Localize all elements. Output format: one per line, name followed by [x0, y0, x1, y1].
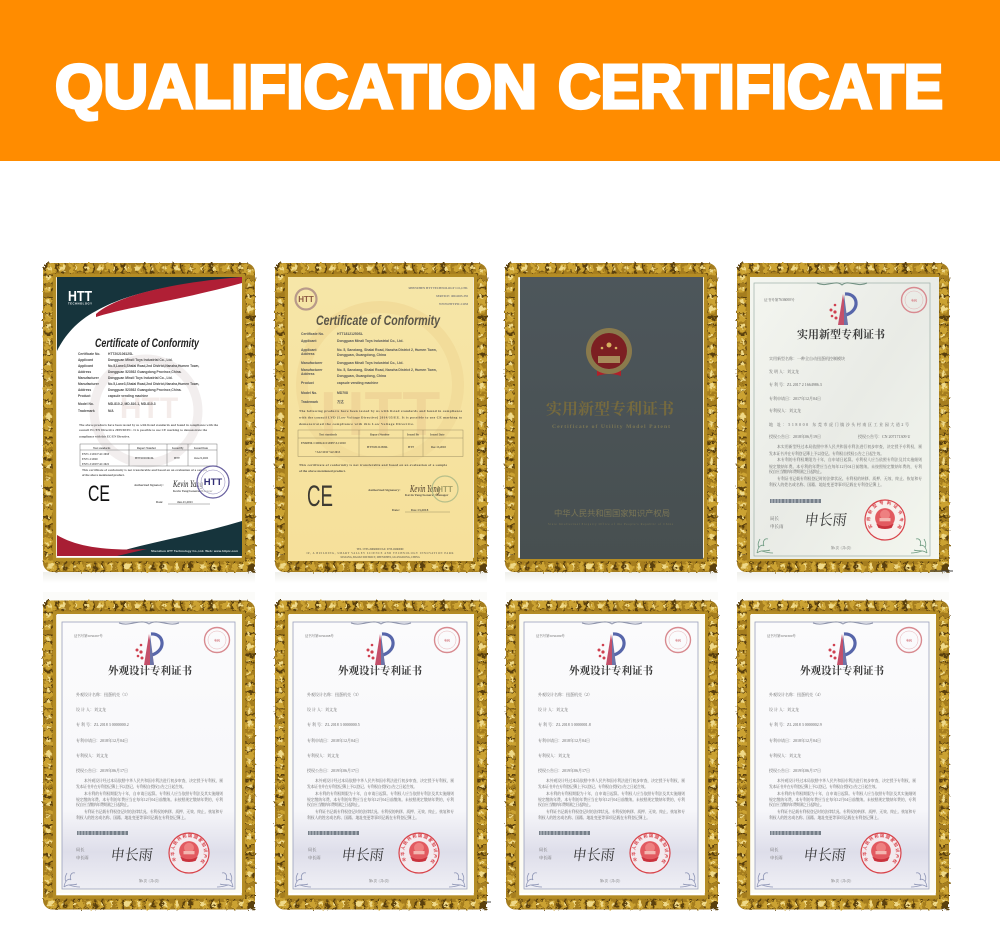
stamp: 专利 [906, 638, 912, 642]
certificate: design patent 2: 权自应当缴纳年费期满之日起终止。 [307, 802, 362, 807]
certificate: design patent 3: 局长 [539, 846, 547, 853]
certificate: design patent 4: 权自应当缴纳年费期满之日起终止。 [769, 802, 824, 807]
certificate: HTT conformity on yellow paper: Certificate No. [301, 332, 324, 336]
certificate: design patent 4: 外观设计专利证书 [800, 664, 884, 677]
certificate: utility model patent: 发 明 人：刘文龙 [769, 368, 799, 374]
seal [860, 832, 902, 874]
certificate: HTT conformity on white with teal and red swooshes: Manufacturer [78, 376, 100, 380]
certificate: design patent 1: 利权人的姓名或名称、国籍、地址变更等事项记载在专利登记簿上。 [76, 815, 188, 820]
certificate: design patent 2: 局长 [308, 846, 316, 853]
certificate: HTT conformity on yellow paper: Dec.13,2018 [431, 445, 446, 449]
certificate: HTT conformity on yellow paper: Kevin Yang/General Manager [405, 493, 449, 497]
certificate: HTT conformity on white with teal and red swooshes: capsule vending machine [108, 394, 148, 398]
certificate: utility model patent: 申长雨 [803, 509, 848, 530]
certificate: HTT conformity on white with teal and red swooshes: Trademark [78, 409, 95, 413]
certificate: HTT conformity on yellow paper: Date: [392, 508, 400, 512]
certificate: design patent 4: 授权公告日：2019年06月17日 [769, 767, 821, 773]
certificate: design patent 1: 规定缴纳年费。本专利的年费应当在每年12月04日前缴纳。未按照规定缴纳年费的，专利 [76, 797, 223, 802]
stamp: 专利 [214, 638, 220, 642]
certificate: design patent 3: 第1页（共1页） [600, 878, 622, 883]
certificate: HTT conformity on white with teal and red swooshes: The above products have been tested by us with listed standards and found in compliance with the [79, 423, 219, 427]
certificate: design patent 4: 专 利 号：ZL 2018 3 0000002.9 [769, 721, 822, 727]
certificate: HTT conformity on yellow paper: Certificate of Conformity [316, 312, 441, 328]
certificate: HTT conformity on white with teal and red swooshes: Manufacturer [78, 382, 100, 386]
certificate: design patent 4: 本专利的专利权期限为十年，自申请日起算。专利权人应当依照专利法及其实施细则 [777, 791, 916, 796]
certificate: design patent 3: 规定缴纳年费。本专利的年费应当在每年12月04日前缴纳。未按照规定缴纳年费的，专利 [538, 797, 685, 802]
black mark at frame corner [485, 902, 491, 903]
certificate: design patent 4: 局长 [770, 846, 778, 853]
certificate: HTT conformity on yellow paper: HTT [408, 445, 414, 449]
certificate: design patent 1: 授权公告日：2019年06月17日 [76, 767, 128, 773]
certificate: HTT conformity on yellow paper: HTT [298, 295, 314, 304]
certificate: design patent 2: 申长雨 [308, 854, 321, 861]
certificate: HTT conformity on yellow paper: IF, A BUILDING, SMART VALLEY SCIENCE AND TECHNOLOGY INNOVATION PARK [306, 552, 454, 555]
certificate: HTT conformity on yellow paper: CE [307, 480, 333, 513]
certificate: HTT conformity on yellow paper: Product [301, 381, 315, 385]
certificate: HTT conformity on white with teal and red swooshes: Applicant [78, 358, 94, 362]
certificate: HTT conformity on white with teal and red swooshes: of the above mentioned product. [82, 473, 125, 477]
certificate: design patent 4: 专利证书记载专利权登记时的法律状况。专利权的转移、质押、无效、终止、恢复和专 [777, 809, 916, 814]
certificate: utility model patent: 专利权人：刘文龙 [769, 407, 801, 413]
certificate: design patent 1: 专利申请日：2018年12月04日 [76, 737, 128, 743]
certificate: utility model patent: 本专利的专利权期限为十年，自申请日起算。专利权人应当依照专利法及其实施细则 [777, 457, 922, 462]
seal [864, 499, 906, 541]
certificate: utility model patent: 实用新型专利证书 [797, 327, 886, 341]
seal: 中华人民共和国国家知识产权局 [170, 834, 208, 864]
certificate: dark utility model patent cover [505, 268, 717, 583]
certificate: HTT conformity on yellow paper: HTT [437, 485, 453, 494]
certificate: HTT conformity on yellow paper: Report Number [370, 432, 390, 436]
certificate: HTT conformity on yellow paper: Applicant [301, 339, 317, 343]
certificate: HTT conformity on white with teal and red swooshes: Kevin Yang/General Manager [173, 489, 213, 493]
header banner [0, 0, 1000, 161]
certificate: HTT conformity on yellow paper: Model No. [301, 391, 317, 395]
certificate: HTT conformity on yellow paper: SERVICE: 400-6025-355 [436, 294, 468, 298]
stamp [666, 628, 690, 652]
certificate: HTT conformity on yellow paper: No. 5, Sanxiang, Shalai Road, Nanzha District 2, Humen Town, [337, 348, 437, 352]
title: CERTIFICATE [558, 53, 943, 122]
seal: 中华人民共和国国家知识产权局 [862, 834, 900, 864]
icon: national emblem [586, 328, 632, 376]
certificate: utility model patent: 专利证书记载专利权登记时的法律状况。专利权的转移、质押、无效、终止、恢复和专 [777, 476, 922, 481]
certificate: HTT conformity on yellow paper: No. 5, Sanxiang, Shalai Road, Nanzha District 2, Humen Town, [337, 368, 437, 372]
certificate: design patent 2: 设 计 人：刘文龙 [307, 706, 337, 712]
certificate: design patent 2: 利权人的姓名或名称、国籍、地址变更等事项记载在专利登记簿上。 [307, 815, 419, 820]
certificate: utility model patent: 专 利 号：ZL 2017 2 1664986.3 [769, 381, 822, 387]
certificate: HTT conformity on yellow paper: This certificate of conformity is not transferable and based on an evaluation of a sample [299, 463, 447, 467]
certificate: HTT conformity on white with teal and red swooshes: Dongguan 523932 Guangdong Province,China. [108, 370, 182, 374]
certificate: HTT conformity on yellow paper: EN60950-1:2006/A11:2009+A1:2010 [301, 441, 346, 445]
certificate: HTT conformity on yellow paper: Authorized Signatory: [368, 488, 400, 492]
certificate: design patent 3: 权自应当缴纳年费期满之日起终止。 [538, 802, 593, 807]
certificate: design patent 1: 本外观设计经过本局依照中华人民共和国专利法进行初步审查，决定授予专利权，颁 [84, 778, 223, 783]
stamp [896, 628, 922, 652]
certificate: HTT conformity on white with teal and red swooshes: N/A [108, 409, 114, 413]
certificate: HTT conformity on yellow paper: Dongguan, Guangdong, China [337, 374, 386, 378]
certificate: utility model patent: 利权人的姓名或名称、国籍、地址变更等事项记载在专利登记簿上。 [769, 482, 884, 487]
certificate: design patent 2: 规定缴纳年费。本专利的年费应当在每年12月04日前缴纳。未按照规定缴纳年费的，专利 [307, 797, 454, 802]
certificate: HTT conformity on white with teal and red swooshes: EN71-3:2019+A1:2021 [82, 463, 110, 466]
certificate: design patent 4: 设 计 人：刘文龙 [769, 706, 799, 712]
certificate: HTT conformity on white with teal and red swooshes: Test standards [93, 447, 111, 450]
certificate: HTT conformity on white with teal and red swooshes: This certificate of conformity is not transferable and based on an evaluation of a sample [82, 468, 208, 472]
certificate: HTT conformity on white with teal and red swooshes: MD-810-2, MD-810-1, MD-810-3 [108, 402, 156, 406]
stamp [204, 628, 230, 652]
certificate: design patent 2: 专利证书记载专利权登记时的法律状况。专利权的转移、质押、无效、终止、恢复和专 [315, 809, 454, 814]
certificate: HTT conformity on white with teal and red swooshes: EN71-1:2014+A1:2018 [82, 453, 110, 456]
certificate: design patent 3: 申长雨 [571, 844, 616, 865]
certificate: HTT conformity on yellow paper: XIXIANG, BAOAN DISTRICT, SHENZHEN, GUANGDONG, CHINA [340, 556, 420, 559]
certificate: HTT conformity on white with teal and red swooshes: Jun.21,2021 [177, 500, 193, 504]
certificate: design patent 3: 外观设计名称：扭蛋机壳（2） [538, 691, 592, 697]
certificate: utility model patent: 实用新型名称：一种全自动扭蛋机控制模块 [769, 355, 845, 361]
certificate: design patent 1: 设 计 人：刘文龙 [76, 706, 106, 712]
certificate: HTT conformity on yellow paper: HTT18121250SL [367, 445, 388, 449]
certificate: HTT conformity on white with teal and red swooshes: Issued By [172, 447, 184, 450]
certificate: design patent 3: 证书号第5050299号 [536, 633, 565, 638]
certificate: HTT conformity on white with teal and red swooshes: Issued Date [194, 447, 209, 450]
certificate: design patent 1: 外观设计专利证书 [108, 664, 192, 677]
certificate: design patent 3: 本外观设计经过本局依照中华人民共和国专利法进行初步审查，决定授予专利权，颁 [546, 778, 685, 783]
certificate: design patent 2: 外观设计专利证书 [338, 664, 422, 677]
certificate: utility model patent: 权自应当缴纳年费期满之日起终止。 [769, 469, 824, 474]
certificate: utility model patent: 专利申请日：2017年12月04日 [769, 395, 821, 401]
certificate: HTT conformity on yellow paper: Address [301, 352, 315, 356]
certificate: HTT conformity on white with teal and red swooshes: Certificate of Conformity [95, 336, 200, 350]
certificate: HTT conformity on white with teal and red swooshes: HTT [204, 477, 222, 488]
certificate: HTT conformity on white with teal and red swooshes: Dongguan Minzli Toys Industrial Co., Ltd. [108, 376, 173, 380]
certificate: HTT conformity on yellow paper: Test standards [319, 432, 338, 436]
stamp: 专利 [444, 638, 450, 642]
certificate: HTT conformity on white with teal and red swooshes: Dongguan Minzli Toys Industrial Co., Ltd. [108, 358, 173, 362]
certificate: utility model patent: 第1页（共1页） [831, 545, 853, 550]
certificate: HTT conformity on yellow paper [275, 268, 487, 583]
certificate: design patent 2: 发本证书并在专利登记簿上予以登记。专利权自授权公告之日起生效。 [307, 784, 417, 789]
certificate: design patent 3: 专 利 号：ZL 2018 3 0000001.8 [538, 721, 591, 727]
certificate: design patent 1: 外观设计名称：扭蛋机壳（1） [76, 691, 130, 697]
certificate: HTT conformity on white with teal and red swooshes: council EC/EN Directive 2009/48/EC. It is possible to use CE marking to demonstrate the [79, 428, 208, 432]
stamp [902, 288, 926, 312]
certificate: HTT conformity on white with teal and red swooshes: Product [78, 394, 91, 398]
certificate: utility model patent: 授权公告日：2018年06月19日 [769, 433, 821, 439]
certificate: design patent 2 [273, 599, 489, 911]
title [55, 53, 943, 122]
seal: 中华人民共和国国家知识产权局 [632, 834, 668, 864]
certificate: HTT conformity on yellow paper: Address [301, 372, 315, 376]
certificate: design patent 3: 设 计 人：刘文龙 [538, 706, 568, 712]
certificate: HTT conformity on white with teal and red swooshes: EN71-2:2020 [82, 458, 98, 461]
certificate: utility model patent: 局长 [770, 515, 779, 522]
certificate: utility model patent [735, 262, 951, 579]
certificate: HTT conformity on yellow paper: WWW.HTTPIC.COM [439, 302, 468, 306]
certificate: HTT conformity on white with teal and red swooshes: HTT20210612SL [108, 352, 133, 356]
certificate: HTT conformity on white with teal and red swooshes: Dongguan 523932 Guangdong Province,China. [108, 388, 182, 392]
certificate: design patent 1 [41, 599, 257, 911]
certificate: HTT conformity on white with teal and red swooshes: Certificate No. [78, 352, 100, 356]
certificate: HTT conformity on yellow paper: The following products have been tested by us with listed standards and found in compliance [299, 409, 462, 413]
certificate: design patent 4 [735, 599, 951, 911]
certificate: design patent 1: 证书号第5050297号 [74, 633, 103, 638]
certificate: design patent 1: 专 利 号：ZL 2018 3 0000000.2 [76, 721, 129, 727]
seal [629, 832, 671, 874]
certificate: HTT conformity on white with teal and red swooshes: HTT [120, 392, 178, 425]
certificate: dark utility model patent cover: 中华人民共和国国家知识产权局 [554, 508, 670, 518]
certificate: HTT conformity on yellow paper: Applicant [301, 348, 317, 352]
certificate: design patent 2: 第1页（共1页） [369, 878, 391, 883]
certificate: utility model patent: 发本证书并在专利登记簿上予以登记。专利权自授权公告之日起生效。 [769, 451, 884, 456]
certificate: HTT conformity on white with teal and red swooshes: Address [78, 370, 91, 374]
stamp: 专利 [911, 298, 917, 302]
certificate: HTT conformity on white with teal and red swooshes: No.5,Lane3,Shalai Road,2nd District,Nanzha,Humen Town, [108, 382, 199, 386]
seal: 中华人民共和国国家知识产权局 [400, 834, 438, 864]
certificate: design patent 4: 专利权人：刘文龙 [769, 752, 801, 758]
certificate: design patent 3: 专利权人：刘文龙 [538, 752, 570, 758]
black mark at frame corner [930, 570, 953, 572]
certificate: design patent 2: 专 利 号：ZL 2018 3 0000000.5 [307, 721, 360, 727]
certificate: HTT conformity on white with teal and red swooshes: Kevin Yang [172, 479, 203, 489]
certificate: HTT conformity on yellow paper: Issued Date [430, 432, 445, 436]
certificate: HTT conformity on yellow paper: demonstrated the compliance with this Low Voltage Directive. [299, 422, 414, 426]
certificate: HTT conformity on white with teal and red swooshes: Model No. [78, 402, 94, 406]
certificate: HTT conformity on yellow paper: HTT18121250SL [337, 332, 363, 336]
certificate: design patent 4: 外观设计名称：扭蛋机壳（4） [769, 691, 823, 697]
certificate: HTT conformity on yellow paper: 万达 [337, 399, 344, 404]
certificate: design patent 3: 发本证书并在专利登记簿上予以登记。专利权自授权公告之日起生效。 [538, 784, 648, 789]
certificate: HTT conformity on yellow paper: TEL: 0755-26060000 FAX: 0755-26060000 [357, 548, 404, 551]
certificate: HTT conformity on white with teal and red swooshes: HTT2021061SL [135, 457, 154, 460]
certificate: HTT conformity on white with teal and red swooshes: Jun.21,2021 [194, 457, 209, 460]
certificate: design patent 1: 权自应当缴纳年费期满之日起终止。 [76, 802, 131, 807]
certificate: HTT conformity on yellow paper: Dongguan Minzli Toys Industrial Co., Ltd. [337, 339, 403, 343]
stamp [434, 628, 460, 652]
certificate: design patent 4: 规定缴纳年费。本专利的年费应当在每年12月04日前缴纳。未按照规定缴纳年费的，专利 [769, 797, 916, 802]
certificate: HTT conformity on yellow paper: Trademark [301, 400, 318, 404]
certificate: HTT conformity on yellow paper: MD708 [337, 391, 348, 395]
title: QUALIFICATION [55, 53, 537, 122]
certificate: HTT conformity on yellow paper: +A12:2011+A2:2013 [315, 450, 341, 454]
certificate: HTT conformity on yellow paper: with the council LVD (Low Voltage Directive) 2014/35/EU. It is possible to use CE marking to [299, 416, 462, 420]
certificate: design patent 3: 专利证书记载专利权登记时的法律状况。专利权的转移、质押、无效、终止、恢复和专 [546, 809, 685, 814]
certificate: design patent 1: 专利权人：刘文龙 [76, 752, 108, 758]
certificate: design patent 3: 外观设计专利证书 [569, 664, 654, 677]
certificate: HTT conformity on yellow paper: capsule vending machine [337, 381, 378, 385]
certificate: dark utility model patent cover: State Intellectual Property Office of the People's Republic of China [548, 523, 674, 526]
certificate: design patent 3: 申长雨 [539, 854, 552, 861]
certificate: HTT conformity on white with teal and red swooshes: Applicant [78, 364, 94, 368]
certificate: HTT conformity on white with teal and red swooshes: Report Number [137, 447, 157, 450]
certificate: design patent 4: 利权人的姓名或名称、国籍、地址变更等事项记载在专利登记簿上。 [769, 815, 881, 820]
certificate: design patent 2: 本专利的专利权期限为十年，自申请日起算。专利权人应当依照专利法及其实施细则 [315, 791, 454, 796]
certificate: design patent 2: 申长雨 [340, 844, 385, 865]
certificate: design patent 2: 证书号第5050298号 [305, 633, 334, 638]
certificate: utility model patent: 申长雨 [770, 523, 784, 530]
certificate: HTT conformity on white with teal and red swooshes: Authorized Signatory: [134, 483, 164, 487]
certificate: HTT conformity on white with teal and red swooshes: Shenzhen HTT Technology Co.,Ltd. Web: www.httpic.com [151, 549, 238, 553]
seal [168, 832, 210, 874]
certificate: HTT conformity on white with teal and red swooshes: Date: [156, 500, 163, 504]
certificate: HTT conformity on yellow paper: Dongguan Minzli Toys Industrial Co., Ltd. [337, 361, 403, 365]
certificate: HTT conformity on white with teal and red swooshes: CE [88, 481, 110, 506]
certificate: design patent 4: 申长雨 [802, 844, 847, 865]
certificate: HTT conformity on yellow paper: Dongguan, Guangdong, China [337, 353, 386, 357]
certificate: design patent 1: 本专利的专利权期限为十年，自申请日起算。专利权人应当依照专利法及其实施细则 [84, 791, 223, 796]
certificate: design patent 2: 授权公告日：2019年06月17日 [307, 767, 359, 773]
certificate: HTT conformity on yellow paper: Kevin Yang [409, 484, 440, 495]
certificate: utility model patent: 授权公告号：CN 207171309 U [858, 433, 911, 439]
certificate: design patent 3: 专利申请日：2018年12月04日 [538, 737, 590, 743]
certificate: HTT conformity on yellow paper: Manufacturer [301, 368, 323, 372]
certificate: HTT conformity on yellow paper: HTT [320, 380, 440, 449]
certificate: utility model patent: 地 址：518000 东莞市虎门镇沙头村南区工业园大道2号 [769, 421, 909, 427]
certificate: HTT conformity on yellow paper: Manufacturer [301, 361, 323, 365]
certificate: design patent 2: 专利申请日：2018年12月04日 [307, 737, 359, 743]
seal: 实用新型专利证书专用章 [866, 501, 904, 530]
certificate: HTT conformity on white with teal and red swooshes: No.5,Lane3,Shalai Road,2nd District,Nanzha,Humen Town, [108, 364, 199, 368]
certificate: design patent 2: 专利权人：刘文龙 [307, 752, 339, 758]
certificate: design patent 4: 专利申请日：2018年12月04日 [769, 737, 821, 743]
certificate: HTT conformity on white with teal and red swooshes: TECHNOLOGY [68, 302, 92, 306]
certificate: design patent 4: 发本证书并在专利登记簿上予以登记。专利权自授权公告之日起生效。 [769, 784, 879, 789]
certificate: utility model patent: 规定缴纳年费。本专利的年费应当在每年12月04日前缴纳。未按照规定缴纳年费的，专利 [769, 464, 922, 469]
certificate: design patent 4: 证书号第5050300号 [767, 633, 796, 638]
certificate: utility model patent: 证书号第7636000号 [764, 297, 795, 302]
certificate: HTT conformity on white with teal and red swooshes: HTT [174, 457, 180, 460]
certificate: HTT conformity on yellow paper: SHENZHEN HTT TECHNOLOGY CO.,LTD. [408, 286, 468, 290]
certificate: design patent 3: 授权公告日：2019年06月17日 [538, 767, 590, 773]
certificate: HTT conformity on white with teal and red swooshes: Address [78, 388, 91, 392]
certificate: HTT conformity on yellow paper: of the above mentioned product. [299, 469, 346, 473]
certificate: design patent 1: 发本证书并在专利登记簿上予以登记。专利权自授权公告之日起生效。 [76, 784, 186, 789]
certificate: design patent 4: 申长雨 [770, 854, 783, 861]
certificate: HTT conformity on white with teal and red swooshes [43, 268, 255, 583]
certificate: design patent 1: 申长雨 [76, 854, 89, 861]
certificate: design patent 1: 专利证书记载专利权登记时的法律状况。专利权的转移、质押、无效、终止、恢复和专 [84, 809, 223, 814]
certificate: design patent 3 [504, 599, 720, 911]
certificate: HTT conformity on white with teal and red swooshes: HTT [68, 288, 92, 305]
certificate: dark utility model patent cover: Certificate of Utility Model Patent [552, 424, 670, 430]
certificate: design patent 2: 外观设计名称：扭蛋机壳（3） [307, 691, 361, 697]
certificate: utility model patent: 本实用新型经过本局依照中华人民共和国专利法进行初步审查，决定授予专利权，颁 [777, 444, 922, 449]
certificate: design patent 4: 第1页（共1页） [831, 878, 853, 883]
certificate: design patent 3: 本专利的专利权期限为十年，自申请日起算。专利权人应当依照专利法及其实施细则 [546, 791, 685, 796]
certificate: design patent 1: 第1页（共1页） [139, 878, 161, 883]
certificate: design patent 4: 本外观设计经过本局依照中华人民共和国专利法进行初步审查，决定授予专利权，颁 [777, 778, 916, 783]
certificate: design patent 3: 利权人的姓名或名称、国籍、地址变更等事项记载在专利登记簿上。 [538, 815, 650, 820]
certificate: design patent 1: 申长雨 [109, 844, 154, 865]
certificate: HTT conformity on yellow paper: Dec.13,2018 [411, 508, 429, 512]
stamp: 专利 [675, 638, 681, 642]
seal [398, 832, 440, 874]
certificate: dark utility model patent cover: 实用新型专利证书 [546, 399, 675, 418]
certificate: design patent 1: 局长 [76, 846, 84, 853]
certificate: HTT conformity on yellow paper: Issued By [407, 432, 420, 436]
certificate: design patent 2: 本外观设计经过本局依照中华人民共和国专利法进行初步审查，决定授予专利权，颁 [315, 778, 454, 783]
certificate: HTT conformity on white with teal and red swooshes: compliance with this EC/EN Directive. [79, 434, 130, 438]
